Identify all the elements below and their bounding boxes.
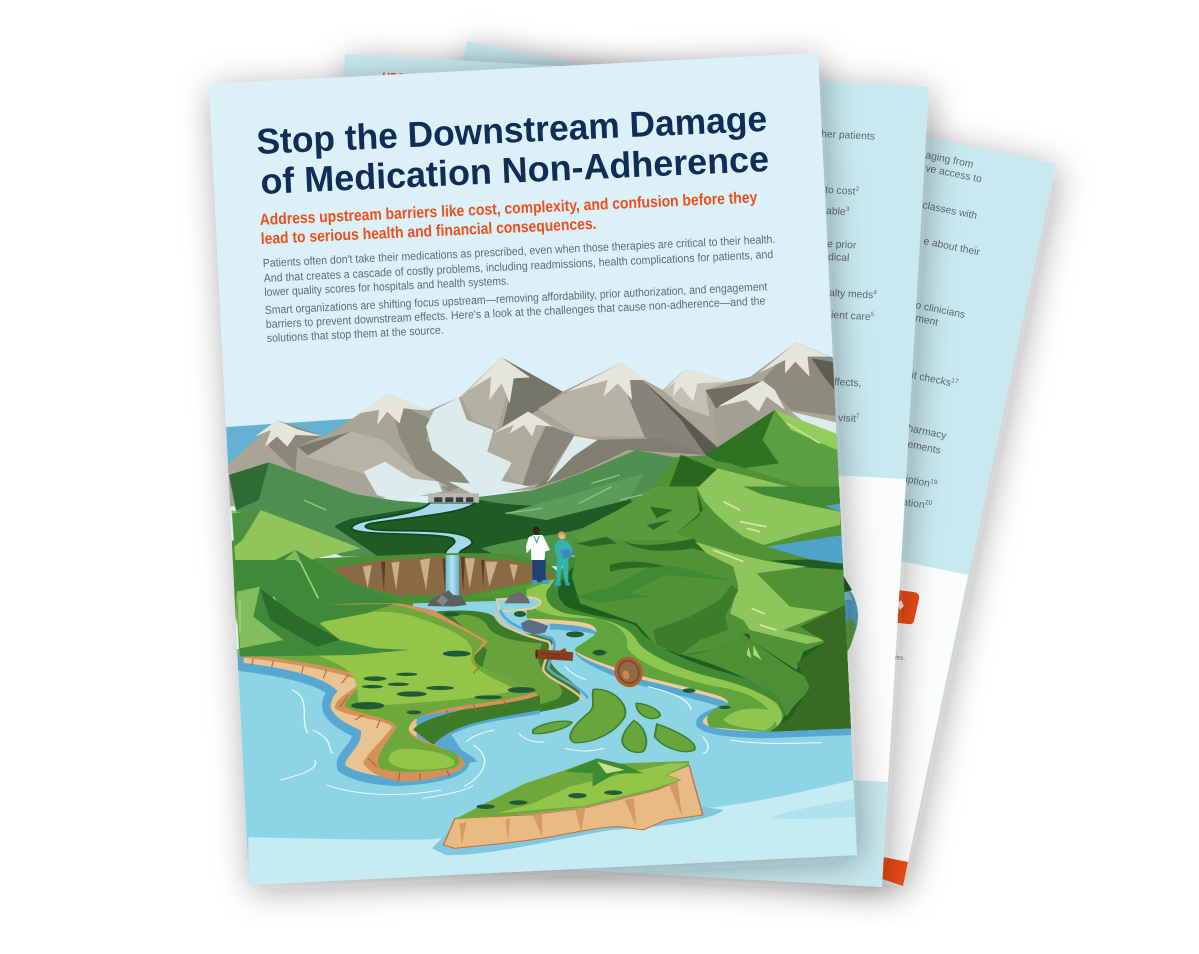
top right light hill [697, 487, 840, 545]
bank lobe [723, 709, 776, 731]
back page [314, 41, 1056, 886]
back page text fragments: harmacy [906, 423, 948, 442]
water wheel [610, 653, 647, 691]
glaciers [364, 397, 840, 501]
right dark hill [770, 603, 852, 732]
back page footnote: ies. [895, 654, 906, 662]
bank lime [527, 557, 852, 732]
back page text fragments: 20 [924, 499, 933, 507]
left land [235, 560, 540, 782]
back page text fragments: ation [902, 497, 925, 511]
hill highlights [723, 502, 767, 532]
mountain range [226, 343, 840, 507]
island cliff stripes [460, 782, 682, 845]
middle page [298, 54, 929, 887]
middle page text fragments: 3 [846, 206, 850, 213]
light foreground water [248, 780, 857, 885]
dam [428, 493, 479, 503]
snow caps [255, 343, 830, 447]
nurse [554, 531, 572, 586]
back page text fragments: it checks [910, 370, 952, 389]
front page body copy: And that creates a cascade of costly problems, including readmissions, health complications for patients, and [264, 249, 774, 285]
back green hills [229, 450, 730, 567]
front page subheading: lead to serious health and financial consequences. [260, 216, 597, 248]
bank rim [527, 557, 852, 732]
bank mid green [546, 557, 852, 732]
back page text fragments: ements [906, 439, 942, 457]
back page orange button [870, 588, 919, 624]
infographic brochure stack [192, 30, 1075, 915]
left shore shallows and sand [239, 653, 465, 782]
front page body copy: barriers to prevent downstream effects. Here's a look at the challenges that cause non-adherence—and the [266, 295, 766, 331]
doctor [526, 527, 550, 584]
water [235, 600, 863, 900]
river left shallow line [500, 610, 588, 698]
bushes on bank [443, 578, 606, 656]
island top [455, 758, 689, 819]
middle page text fragments: e prior [827, 239, 857, 252]
back page white panel [700, 536, 968, 862]
green band behind cliff [230, 540, 579, 620]
island cliff [443, 765, 703, 848]
front page [209, 53, 863, 900]
middle page text fragments: ient care [831, 310, 871, 323]
front page body copy: lower quality scores for hospitals and health systems. [264, 275, 509, 299]
foreground water patch [769, 798, 858, 819]
pool tip [497, 597, 541, 612]
islets [533, 689, 695, 752]
mid-land dark fringe [413, 695, 540, 745]
top right dark hill [743, 487, 840, 512]
back page button arrow [897, 600, 904, 610]
middle page text fragments: able [826, 206, 846, 218]
distant sea [220, 419, 355, 473]
right shore sand [526, 578, 846, 732]
front page body copy: Smart organizations are shifting focus upstream—removing affordability, prior authorization, and engagement [265, 281, 768, 317]
river details and props [427, 527, 647, 700]
back page text fragments: 19 [930, 478, 938, 486]
dark valley [558, 557, 852, 732]
front page title [256, 98, 770, 202]
rocks [427, 590, 548, 634]
middle page text fragments: her patients [821, 129, 875, 143]
hill streaks [240, 562, 318, 633]
bottom hill [683, 633, 810, 717]
left foreground hills [231, 510, 404, 623]
hill base [572, 487, 852, 655]
top ridge [573, 487, 703, 543]
lower mid hill [653, 585, 738, 655]
shore stripes [252, 658, 507, 782]
back page text fragments: aging from [924, 150, 974, 171]
cliff band [237, 603, 539, 782]
upper river [351, 503, 475, 557]
hill ridge shadow [260, 588, 340, 647]
back page text fragments: iption [904, 474, 931, 490]
central hill strokes [575, 565, 730, 603]
river left sand bank [495, 612, 583, 700]
lake [767, 535, 843, 564]
front page body copy [263, 234, 776, 345]
back page text fragments [902, 150, 983, 512]
middle page text fragments: alty meds [829, 288, 873, 301]
left hill base [235, 560, 397, 657]
lawn below cliff [467, 580, 550, 598]
front page subheading [259, 189, 758, 248]
back page text fragments: o clinicians [914, 300, 966, 321]
right mid hill [750, 600, 845, 670]
upper right hills [644, 410, 844, 513]
log [535, 648, 573, 661]
small lake [825, 503, 841, 512]
bushes [351, 612, 536, 714]
lime land base [237, 603, 535, 772]
front hill light [237, 587, 283, 648]
middle page text fragments: 4 [873, 289, 877, 297]
middle page circular illustration [766, 570, 858, 662]
front page body copy: Patients often don't take their medications as prescribed, even when those therapies are critical to their health. [263, 234, 776, 270]
middle page text fragments: 5 [871, 311, 875, 318]
dark ledge under lake [770, 559, 845, 570]
middle page heading fragment: UPSTREAM [382, 71, 444, 86]
lime land highlight [311, 612, 517, 707]
cliff face [332, 556, 557, 595]
back page orange footer [882, 857, 908, 886]
middle page text fragments [821, 129, 877, 425]
island top highlight [496, 763, 689, 813]
back page text fragments: 17 [951, 377, 960, 386]
right shore shallows [550, 626, 852, 735]
middle page text fragments: 7 [856, 413, 860, 420]
front page title: of Medication Non-Adherence [260, 138, 770, 202]
middle page text fragments: visit [838, 413, 856, 425]
front page body copy: solutions that stop them at the source. [267, 325, 444, 345]
back page text fragments: ve access to [924, 163, 983, 185]
upper creases [577, 490, 710, 573]
back page text fragments: ment [914, 313, 939, 329]
front page title: Stop the Downstream Damage [256, 98, 768, 162]
landscape illustration [220, 343, 863, 900]
back page text fragments: classes with [921, 200, 978, 222]
back page text fragments: e about their [922, 236, 981, 258]
island bushes [476, 650, 731, 809]
middle page text fragments: to cost [825, 185, 856, 198]
middle page white panel [600, 463, 906, 782]
right hills and bank [527, 487, 852, 735]
middle page text fragments: dical [828, 252, 850, 264]
middle page text fragments: 2 [855, 186, 860, 193]
middle page text fragments: ffects, [834, 377, 862, 389]
delta islets and foreground island [280, 650, 822, 855]
mountains and back hills [220, 343, 844, 623]
upper dark meadow [240, 604, 410, 657]
island shadow [432, 807, 723, 855]
lower lime lobe [388, 749, 455, 770]
middle light hill [695, 542, 828, 644]
water ripples [280, 667, 822, 798]
waterfall [446, 555, 459, 597]
front page subheading: Address upstream barriers like cost, complexity, and confusion before they [259, 189, 758, 229]
river-side shallow band [417, 695, 540, 763]
middle land strip [395, 610, 580, 767]
